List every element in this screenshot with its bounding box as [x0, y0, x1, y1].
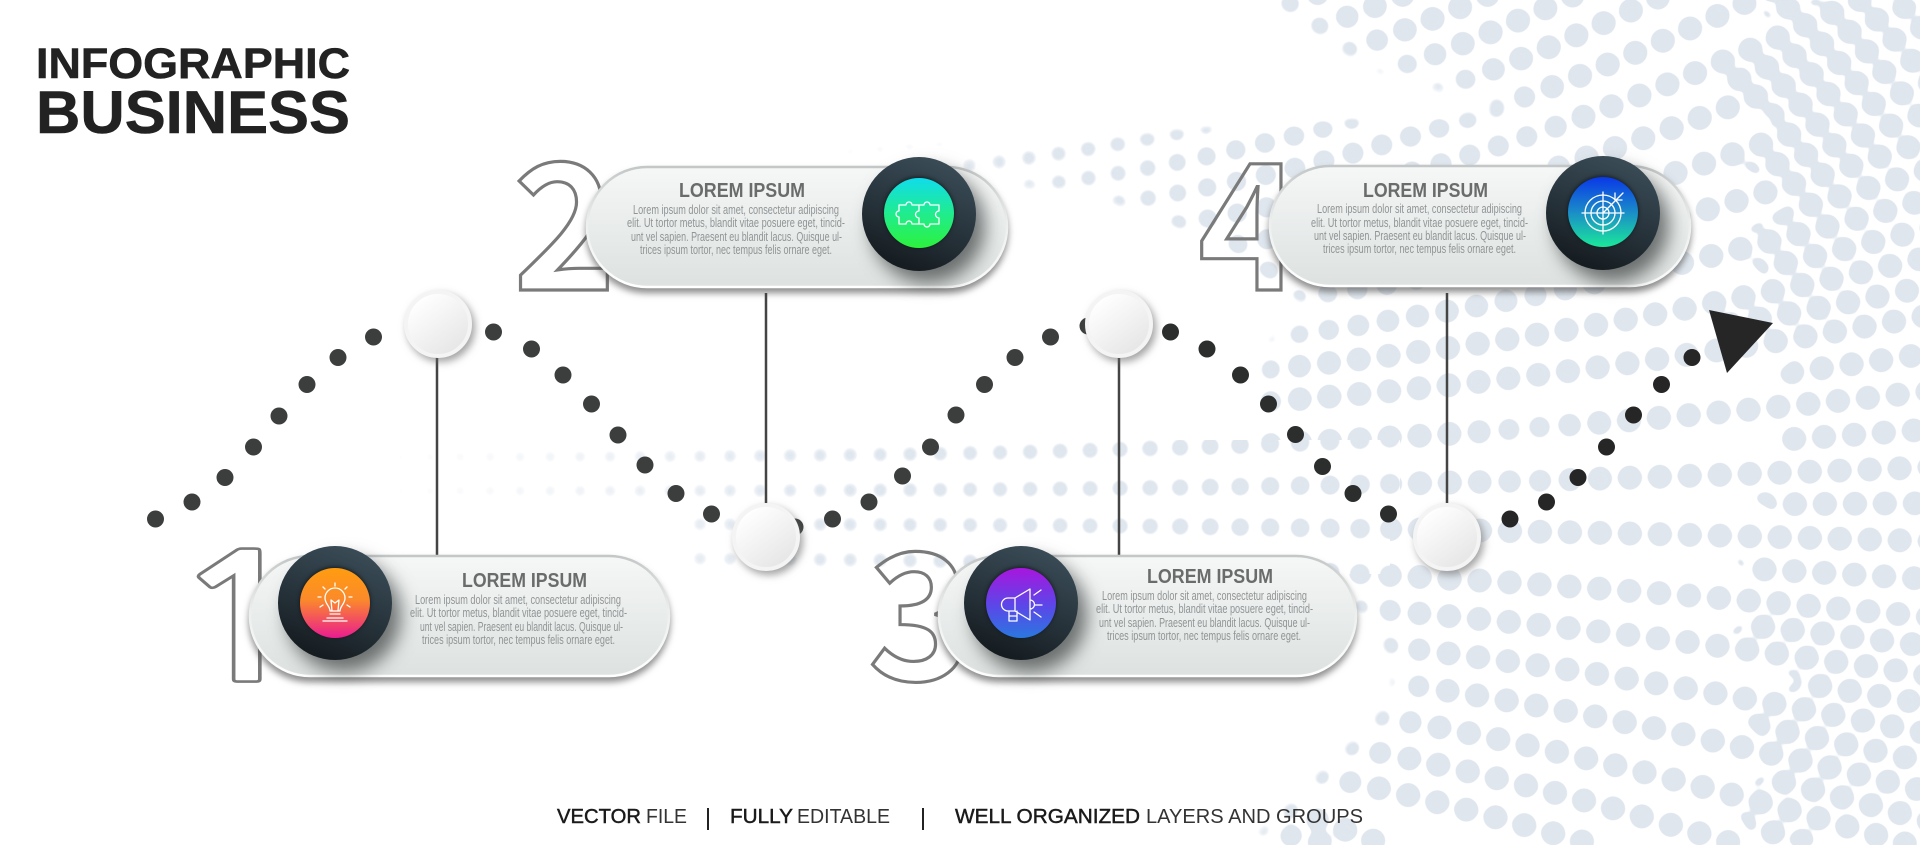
icon: light bulb — [318, 583, 352, 621]
icon: puzzle — [896, 202, 939, 227]
heading 2: LOREM IPSUM — [679, 180, 805, 202]
footer tagline: EDITABLE — [797, 806, 890, 828]
body 2 — [627, 203, 845, 257]
pill 2 — [587, 167, 1007, 287]
step 4 — [1198, 88, 1690, 341]
heading 4: LOREM IPSUM — [1363, 180, 1488, 202]
body 3: unt vel sapien. Praesent eu blandit lacus. Quisque ul- — [1099, 616, 1310, 630]
footer tagline: LAYERS AND GROUPS — [1146, 806, 1363, 828]
body 3: Lorem ipsum dolor sit amet, consectetur adipiscing — [1102, 589, 1307, 603]
disc 2 — [862, 157, 976, 271]
heading 3: LOREM IPSUM — [1147, 566, 1273, 588]
body 4: trices ipsum tortor, nec tempus felis ornare eget. — [1323, 242, 1516, 256]
pill 3 — [939, 556, 1356, 676]
heading 1: LOREM IPSUM — [462, 570, 587, 592]
step 1 — [167, 534, 669, 707]
title: BUSINESS — [36, 79, 350, 146]
body 3: elit. Ut tortor metus, blandit vitae posuere eget, tincid- — [1096, 602, 1313, 616]
halftone dot pattern — [400, 0, 1920, 845]
connector lines — [437, 293, 1447, 556]
footer tagline — [557, 806, 1363, 830]
icon: megaphone — [1002, 589, 1042, 621]
dotted path — [147, 318, 1700, 536]
disc 1 — [278, 546, 392, 660]
body 2: unt vel sapien. Praesent eu blandit lacus. Quisque ul- — [631, 230, 842, 244]
footer tagline: WELL ORGANIZED — [955, 806, 1140, 828]
body 1: trices ipsum tortor, nec tempus felis ornare eget. — [422, 633, 615, 647]
disc 2 colour — [884, 178, 954, 248]
number 4: 4 — [1198, 88, 1301, 341]
body 4: unt vel sapien. Praesent eu blandit lacus. Quisque ul- — [1314, 229, 1526, 243]
icon: target — [1582, 192, 1624, 234]
step 2 — [513, 88, 1007, 341]
body 3: trices ipsum tortor, nec tempus felis ornare eget. — [1107, 629, 1301, 643]
disc 4 colour — [1568, 177, 1638, 247]
title — [36, 40, 350, 146]
body 1: Lorem ipsum dolor sit amet, consectetur adipiscing — [415, 593, 621, 607]
body 2: Lorem ipsum dolor sit amet, consectetur adipiscing — [633, 203, 839, 217]
step 3 — [868, 478, 1356, 731]
body 1 — [410, 593, 627, 647]
body 4: elit. Ut tortor metus, blandit vitae posuere eget, tincid- — [1311, 216, 1528, 230]
body 2: elit. Ut tortor metus, blandit vitae posuere eget, tincid- — [627, 216, 845, 230]
footer tagline: FULLY — [730, 806, 793, 828]
number 2: 2 — [513, 88, 616, 341]
title: INFOGRAPHIC — [36, 40, 350, 88]
body 2: trices ipsum tortor, nec tempus felis ornare eget. — [640, 243, 832, 257]
disc 3 colour — [986, 568, 1056, 638]
body 4: Lorem ipsum dolor sit amet, consectetur adipiscing — [1317, 202, 1522, 216]
arrow head — [1709, 310, 1773, 373]
pill 1 — [250, 556, 669, 676]
body 1: elit. Ut tortor metus, blandit vitae posuere eget, tincid- — [410, 606, 627, 620]
pill 4 — [1270, 166, 1690, 286]
footer tagline: VECTOR — [557, 806, 641, 828]
number 3: 3 — [868, 478, 971, 731]
timeline nodes — [406, 292, 1479, 569]
body 3 — [1096, 589, 1313, 643]
disc 1 colour — [300, 568, 370, 638]
body 1: unt vel sapien. Praesent eu blandit lacus. Quisque ul- — [420, 620, 623, 634]
disc 4 — [1546, 156, 1660, 270]
footer tagline: FILE — [646, 806, 687, 828]
body 4 — [1311, 202, 1528, 256]
number 1: 1 — [167, 534, 315, 707]
disc 3 — [964, 546, 1078, 660]
